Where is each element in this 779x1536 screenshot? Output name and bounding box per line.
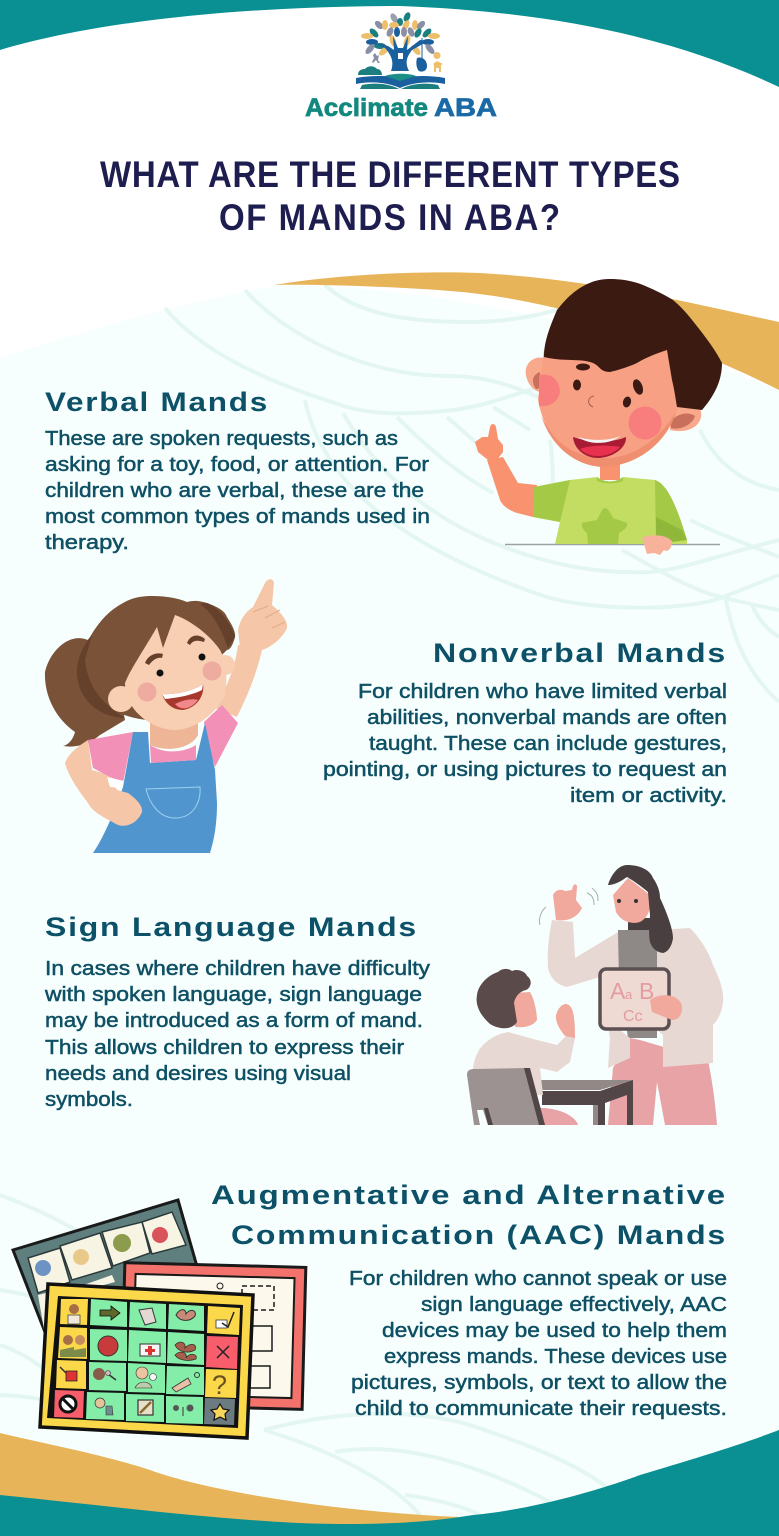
mouth [162, 684, 203, 710]
panel: AAC mands text [211, 1180, 727, 1420]
yellow board [40, 1284, 253, 1438]
table edge [505, 544, 720, 546]
teacher hair [608, 865, 673, 953]
ears [526, 357, 545, 392]
body: AAC mands: sign language effectively, AAC [421, 1294, 727, 1316]
mouth [573, 437, 626, 458]
teacher cardigan left [548, 920, 630, 1068]
raised arm [215, 645, 262, 717]
eyes and brows [156, 670, 164, 676]
face [125, 615, 226, 730]
panel: sign language mands text [44, 912, 430, 1111]
motion lines [539, 888, 598, 925]
left arm [65, 740, 117, 803]
arm [487, 457, 537, 517]
hand on hip [88, 790, 142, 826]
pink shirt collar [150, 745, 196, 763]
body: verbal mands: most common types of mands used in [45, 506, 430, 528]
child hand [556, 1004, 575, 1038]
hair [544, 279, 722, 410]
body: nonverbal mands [323, 681, 727, 807]
heading: sign language mands: Sign Language Mands [45, 912, 418, 942]
logo swing [421, 38, 423, 58]
body: AAC mands [349, 1268, 727, 1420]
child torso [473, 1032, 575, 1095]
icon: AAC communication boards [13, 1200, 306, 1438]
teacher trousers [608, 1038, 717, 1125]
face [538, 345, 680, 467]
body: nonverbal mands: pointing, or using pictures to request an [323, 759, 727, 781]
body: AAC mands: express mands. These devices use [384, 1346, 727, 1368]
body: sign language mands: with spoken language, sign language [44, 984, 422, 1006]
bottom gold wave [0, 1433, 460, 1530]
heading: AAC mands: Communication (AAC) Mands [231, 1220, 727, 1250]
teacher neck [628, 918, 650, 930]
body: nonverbal mands: taught. These can include gestures, [369, 733, 727, 755]
teacher face [613, 878, 651, 923]
cheeks [628, 406, 662, 440]
body: AAC mands: pictures, symbols, or text to allow the [351, 1372, 727, 1394]
body: sign language mands: This allows children to express their [45, 1037, 404, 1059]
front hand [642, 535, 672, 555]
body: nonverbal mands: abilities, nonverbal mands are often [367, 707, 727, 729]
hair back [77, 596, 235, 720]
icon: teacher and child signing: B [639, 978, 654, 1004]
icon: teacher and child signing: Cc [623, 1008, 643, 1025]
cheeks [138, 682, 156, 702]
body: AAC mands: devices may be used to help them [382, 1320, 727, 1342]
symbol grid [54, 1299, 240, 1425]
title [100, 154, 680, 238]
logo wordmark: ABA [434, 94, 497, 122]
ears [108, 686, 134, 712]
left sleeve [88, 732, 133, 783]
logo tree leaves [361, 11, 440, 57]
shirt [533, 477, 687, 544]
pointing hand [475, 424, 503, 460]
panel: verbal mands text [45, 387, 430, 554]
body: verbal mands: therapy. [45, 532, 129, 554]
teacher eyes [617, 899, 621, 903]
raised sleeve [204, 705, 238, 767]
heading: AAC mands: Augmentative and Alternative [211, 1180, 727, 1210]
heading: verbal mands: Verbal Mands [45, 387, 269, 417]
pointing hand [238, 579, 287, 650]
waist gap [107, 777, 124, 788]
neck [600, 460, 620, 480]
logo wordmark [305, 94, 497, 122]
body: sign language mands: needs and desires using visual [45, 1063, 351, 1085]
chair [467, 1068, 545, 1125]
neck [150, 722, 198, 749]
body: AAC mands: For children who cannot speak or use [349, 1268, 727, 1290]
logo [305, 11, 497, 122]
top teal wave [0, 0, 779, 87]
child hair [477, 969, 531, 1028]
table [538, 1080, 633, 1090]
child face [513, 992, 537, 1027]
teacher shirt [618, 930, 657, 1038]
brow [576, 364, 590, 370]
red board [121, 1263, 306, 1409]
ponytail [45, 638, 125, 747]
symbols [69, 1304, 79, 1314]
logo bush [358, 66, 382, 75]
panel: nonverbal mands text [323, 638, 727, 807]
grey board [13, 1200, 198, 1345]
body: verbal mands: These are spoken requests, such as [45, 428, 398, 450]
body: verbal mands [45, 428, 430, 554]
teacher hand on board [650, 995, 682, 1020]
shirt star [582, 508, 627, 544]
eyes [573, 380, 581, 390]
title: OF MANDS IN ABA? [219, 197, 560, 238]
logo tree trunk [372, 36, 428, 71]
nose [589, 396, 594, 407]
body: sign language mands: In cases where children have difficulty [45, 958, 430, 980]
body: sign language mands [44, 958, 430, 1111]
body: AAC mands: child to communicate their requests. [355, 1398, 727, 1420]
overalls [93, 723, 217, 853]
yellow board: ? [212, 1370, 227, 1400]
icon: girl pointing [45, 579, 287, 853]
icon: teacher and child signing [467, 865, 723, 1125]
icon: boy pointing [475, 279, 722, 555]
body: verbal mands: asking for a toy, food, or attention. For [45, 454, 429, 476]
board [600, 969, 669, 1029]
body: sign language mands: may be introduced as a form of mand. [45, 1010, 423, 1032]
logo book [356, 76, 445, 88]
title: WHAT ARE THE DIFFERENT TYPES [100, 154, 680, 195]
bottom teal wave [0, 1430, 779, 1536]
pocket [146, 787, 200, 818]
heading: AAC mands [211, 1180, 727, 1250]
teacher raised hand [553, 884, 582, 920]
teacher cardigan right [657, 928, 723, 1067]
logo wordmark: Acclimate [305, 94, 428, 122]
board letters: A [610, 978, 626, 1004]
body: sign language mands: symbols. [45, 1089, 133, 1111]
body: nonverbal mands: item or activity. [570, 785, 727, 807]
body: verbal mands: children who are verbal, these are the [45, 480, 424, 502]
gold wave top [274, 272, 779, 390]
icon: teacher and child signing: a [625, 987, 633, 1002]
logo children [433, 52, 443, 72]
child trousers [490, 1108, 578, 1125]
body: nonverbal mands: For children who have limited verbal [358, 681, 727, 703]
heading: nonverbal mands: Nonverbal Mands [433, 638, 727, 668]
